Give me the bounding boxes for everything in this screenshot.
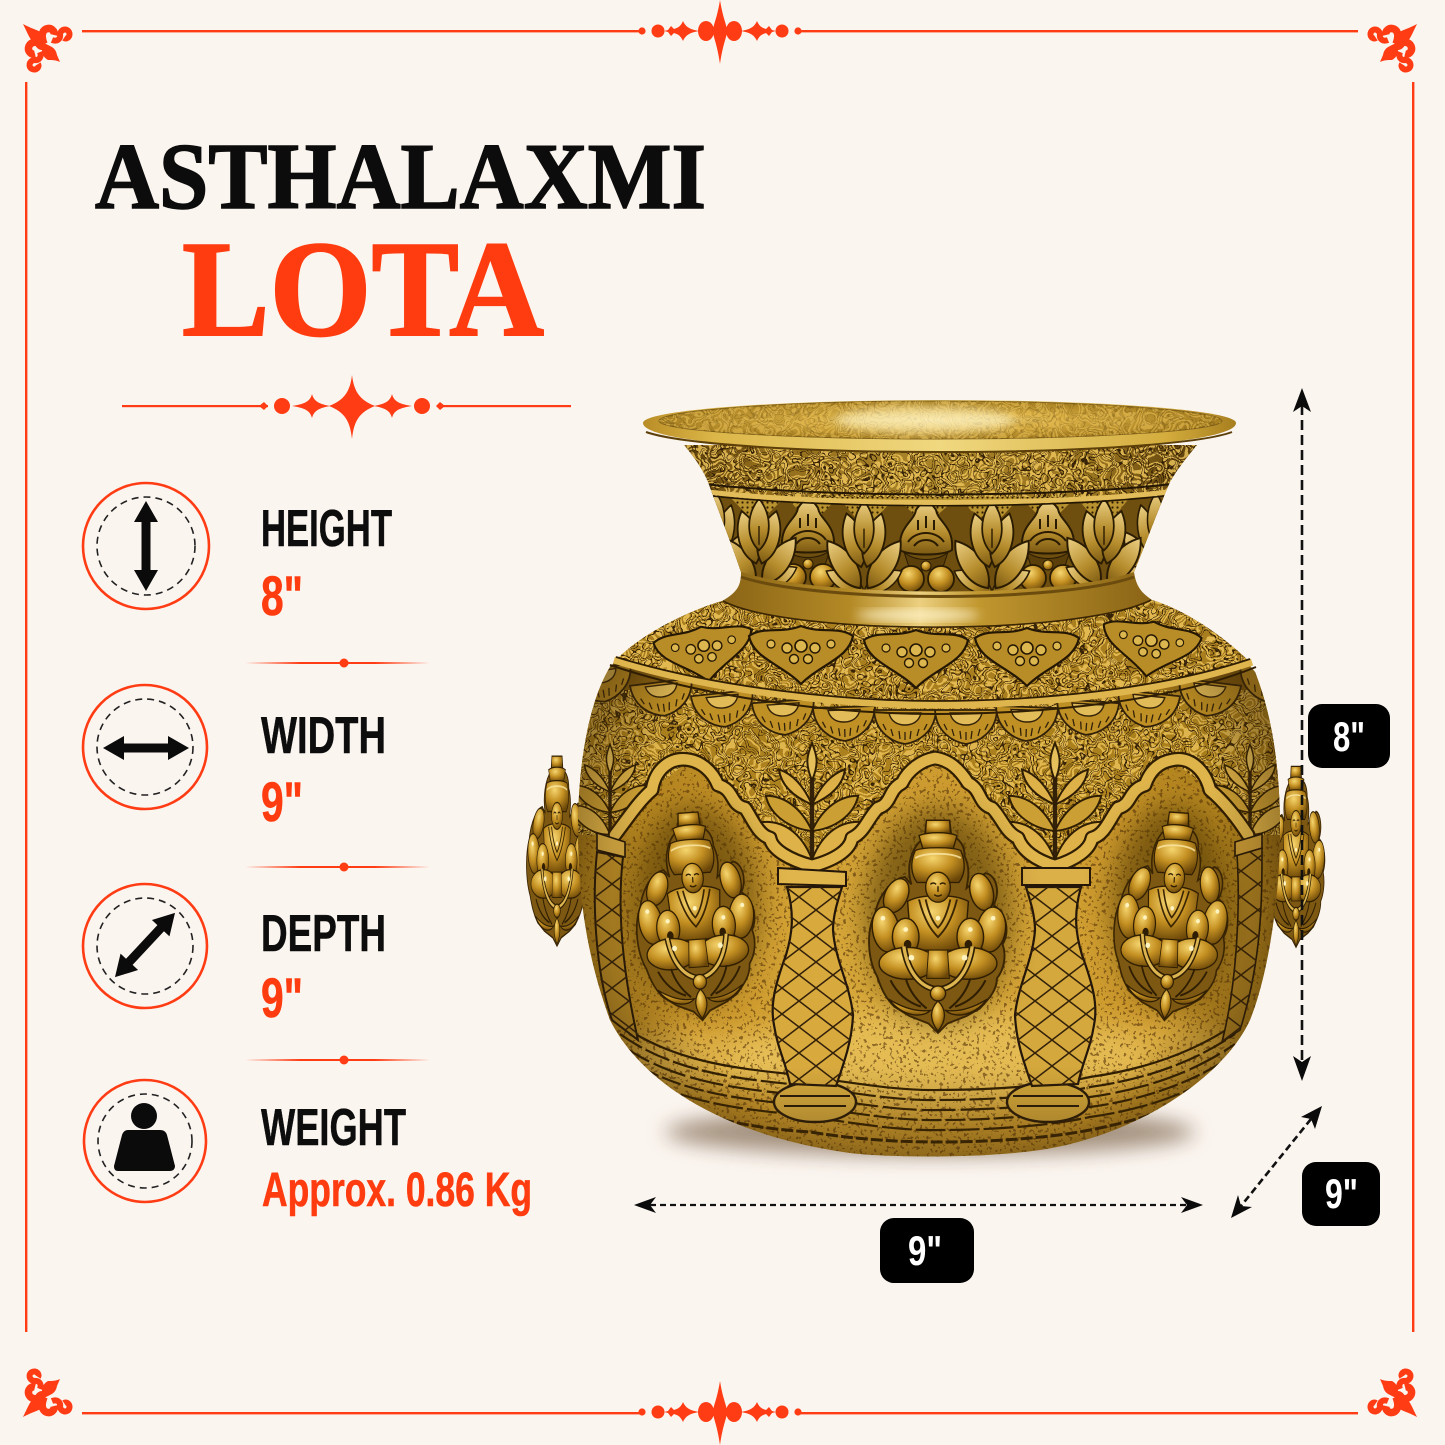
icon: top center ornament bbox=[638, 0, 802, 64]
neck lower panel bbox=[712, 494, 1165, 592]
spec: depth bbox=[83, 884, 386, 1029]
pot body bbox=[560, 590, 1302, 1170]
vase pillar left bbox=[773, 868, 856, 1122]
shoulder engraved band bbox=[610, 600, 1256, 715]
edge shading bbox=[578, 601, 1280, 1150]
tree motif right bbox=[1004, 743, 1106, 864]
neck upper band engraving bbox=[680, 445, 1200, 505]
dimension badge: height: 8" bbox=[1333, 713, 1365, 760]
tree motif far right bbox=[1216, 742, 1280, 835]
spec: height bbox=[83, 483, 392, 627]
dimension badge: width bbox=[880, 1218, 974, 1283]
neck band lines bbox=[704, 484, 1172, 506]
dimension arrow: height bbox=[1293, 388, 1311, 1081]
deity relief shadows bbox=[631, 805, 1232, 1023]
icon: bottom left corner fleur bbox=[23, 1371, 70, 1417]
pot side figure left bbox=[527, 756, 588, 946]
title accent word: LOTA bbox=[182, 213, 544, 365]
divider bbox=[245, 658, 430, 668]
right deity medallion bbox=[1108, 809, 1237, 1024]
icon: bottom center ornament bbox=[638, 1381, 802, 1445]
tree motif left bbox=[761, 743, 863, 864]
value: height: 8" bbox=[261, 564, 303, 627]
icon: depth arrow bbox=[83, 884, 207, 1008]
vase pillar far left bbox=[595, 833, 638, 1040]
icon: weight bbox=[84, 1080, 206, 1202]
engraved foliage zone bbox=[570, 690, 1290, 870]
tree motif far left bbox=[578, 742, 646, 835]
label: width: WIDTH bbox=[261, 707, 386, 765]
spec: weight bbox=[84, 1080, 532, 1217]
lobed arch ribbons bbox=[615, 758, 1248, 866]
value: width: 9" bbox=[261, 770, 303, 833]
dotted triangles bbox=[730, 497, 1129, 519]
palmette row bbox=[677, 493, 1195, 600]
label: weight: WEIGHT bbox=[261, 1099, 406, 1157]
title: ASTHALAXMI bbox=[95, 125, 706, 229]
dimension arrow: depth bbox=[1231, 1106, 1322, 1218]
title bbox=[95, 125, 706, 365]
divider bbox=[245, 862, 430, 872]
label: height: HEIGHT bbox=[261, 500, 392, 558]
icon: height arrow bbox=[83, 483, 209, 609]
scalloped band bbox=[569, 663, 1302, 744]
value: weight: Approx. 0.86 Kg bbox=[262, 1164, 532, 1217]
pot neck bbox=[684, 445, 1197, 592]
lower wave lines bbox=[620, 1024, 1235, 1142]
pot ground shadow bbox=[665, 1108, 1195, 1156]
divider bbox=[245, 1056, 430, 1064]
value: depth: 9" bbox=[261, 966, 303, 1029]
title divider ornament bbox=[122, 375, 571, 439]
dimension badge: depth bbox=[1302, 1162, 1380, 1226]
brass lota pot illustration bbox=[527, 400, 1326, 1170]
spec: width bbox=[83, 685, 386, 833]
pot side figure right bbox=[1267, 767, 1326, 947]
vase pillar far right bbox=[1222, 834, 1262, 1042]
pot collar bbox=[722, 572, 1152, 627]
icon: width arrow bbox=[83, 685, 207, 809]
shoulder heart lobes bbox=[652, 615, 1203, 688]
left deity medallion bbox=[629, 809, 763, 1024]
dimension badge: depth: 9" bbox=[1325, 1170, 1358, 1217]
central deity medallion bbox=[869, 820, 1008, 1033]
label: depth: DEPTH bbox=[261, 905, 386, 963]
dimension badge: height bbox=[1308, 704, 1390, 768]
vase pillar right bbox=[1007, 868, 1095, 1122]
pot rim bbox=[643, 400, 1236, 452]
icon: bottom right corner fleur bbox=[1370, 1371, 1417, 1417]
dimension badge: width: 9" bbox=[908, 1227, 942, 1274]
dimension arrow: width bbox=[634, 1197, 1203, 1213]
icon: top left corner fleur bbox=[23, 24, 70, 70]
icon: top right corner fleur bbox=[1370, 24, 1417, 70]
